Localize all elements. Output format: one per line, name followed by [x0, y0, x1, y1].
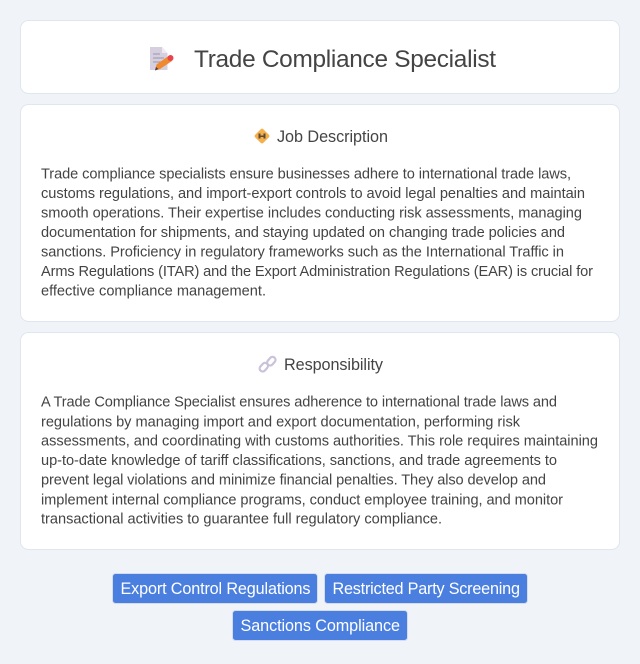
text block: responsibility: A Trade Compliance Specialist ensures adherence to international trade laws and [41, 395, 557, 411]
icon: link [258, 356, 277, 373]
text block: job description: sanctions. Proficiency in regulatory frameworks such as the International Traffic in [41, 245, 564, 261]
text block: job description: effective compliance management. [41, 284, 266, 300]
text block: responsibility: implement internal compliance programs, conduct employee training, and monitor [41, 492, 563, 508]
title: Trade Compliance Specialist [194, 46, 496, 73]
text block: job description [41, 167, 593, 300]
text block: job description: customs regulations, and import-export controls to avoid legal penalties and maintain [41, 186, 585, 202]
text block: responsibility: regulations by managing import and export documentation, performing risk [41, 414, 521, 430]
heading: job description: Job Description [277, 128, 388, 146]
icon: memo with pencil [150, 47, 174, 70]
text block: job description: Trade compliance specialists ensure businesses adhere to international trade laws, [41, 167, 571, 183]
text block: responsibility: up-to-date knowledge of tariff classifications, sanctions, and trade agreements to [41, 453, 557, 469]
panel: responsibility [20, 332, 620, 550]
text block: job description: smooth operations. Their expertise includes conducting risk assessments, managing [41, 206, 582, 222]
panel: job description [20, 104, 620, 322]
tag: restricted party screening: Restricted Party Screening [332, 580, 520, 598]
text block: responsibility: prevent legal violations and minimize financial penalties. They also develop and [41, 473, 546, 489]
icon: job description diamond [254, 128, 270, 144]
tag: sanctions compliance [232, 610, 408, 640]
text block: responsibility [41, 395, 598, 528]
tag: sanctions compliance: Sanctions Compliance [240, 617, 400, 635]
panel: title header [20, 20, 620, 94]
text block: responsibility: transactional activities to guarantee full regulatory compliance. [41, 512, 442, 528]
tag: export control regulations [112, 574, 318, 604]
text block: job description: documentation for shipments, and staying updated on changing trade policies and [41, 225, 565, 241]
text block: responsibility: assessments, and coordinating with customs authorities. This role requires maintaining [41, 434, 598, 450]
tag: restricted party screening [324, 574, 528, 604]
tag: export control regulations: Export Control Regulations [120, 580, 310, 598]
text block: job description: Arms Regulations (ITAR) and the Export Administration Regulations (EAR) is crucial for [41, 264, 593, 280]
heading: responsibility: Responsibility [284, 356, 384, 374]
